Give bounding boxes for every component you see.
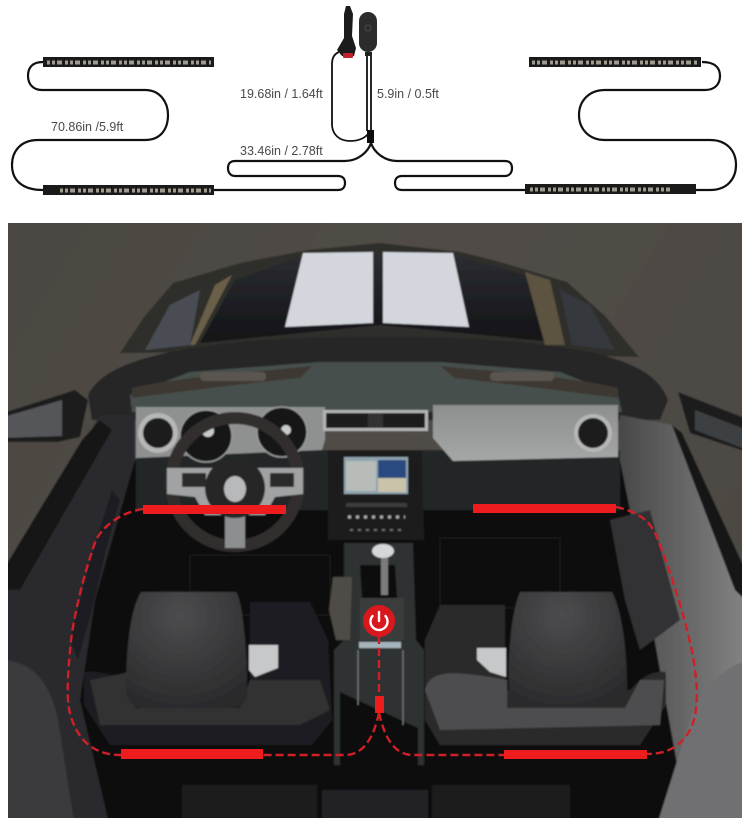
rear seats	[182, 785, 570, 818]
right round vent	[574, 414, 612, 452]
led strip: bottom left	[43, 185, 214, 195]
visors	[132, 366, 618, 398]
led strip: top left	[43, 57, 214, 67]
upper dashboard	[130, 362, 622, 412]
windshield frame	[88, 348, 668, 420]
left door edge	[0, 420, 112, 590]
right door	[620, 414, 742, 761]
center stack	[328, 450, 424, 540]
left round vent	[138, 413, 178, 453]
cabin floor	[80, 460, 680, 818]
label: controller cable length: 19.68in / 1.64ft	[240, 87, 323, 101]
red dashed wiring routes	[68, 507, 697, 755]
left seat	[84, 602, 332, 745]
floor mats	[190, 538, 560, 615]
silver dash right	[433, 405, 618, 461]
parking brake	[329, 577, 352, 640]
gear shifter	[372, 544, 394, 595]
label: inner cable length: 33.46in / 2.78ft	[240, 144, 323, 158]
led strip: top right	[529, 57, 701, 67]
label: outer cable length: 70.86in /5.9ft	[51, 120, 124, 134]
silver dash left	[136, 407, 325, 458]
lower dashboard	[136, 450, 620, 510]
photo shading group	[0, 213, 750, 818]
icon: cigarette lighter plug	[337, 6, 356, 58]
cable: lighter and remote	[332, 52, 371, 141]
center console	[334, 543, 424, 765]
label: remote cable length: 5.9in / 0.5ft	[377, 87, 439, 101]
steering wheel	[167, 418, 303, 548]
icon: power button	[363, 605, 395, 637]
hood stripes	[285, 252, 469, 327]
gauges	[180, 407, 307, 462]
connector	[367, 130, 374, 143]
red led bars	[121, 504, 647, 759]
right seat	[425, 605, 666, 745]
rear right panel	[658, 662, 742, 818]
wiring diagram	[12, 6, 736, 195]
left headrest	[126, 592, 247, 708]
center vents	[323, 410, 428, 431]
right door edge	[672, 426, 742, 598]
icon: remote controller	[359, 12, 377, 56]
right door glass and trim	[610, 510, 680, 650]
rear left panel	[8, 660, 74, 818]
left side mirror	[0, 390, 88, 442]
car hood	[120, 243, 639, 357]
cable: left strip run	[12, 62, 371, 190]
left door details	[70, 490, 120, 660]
right side mirror	[678, 392, 742, 451]
cable: right strip run	[371, 62, 736, 190]
led strip: bottom right	[525, 184, 696, 194]
asphalt background	[8, 223, 742, 565]
right headrest	[508, 590, 628, 691]
left door	[0, 415, 135, 818]
car interior photo	[0, 213, 750, 818]
